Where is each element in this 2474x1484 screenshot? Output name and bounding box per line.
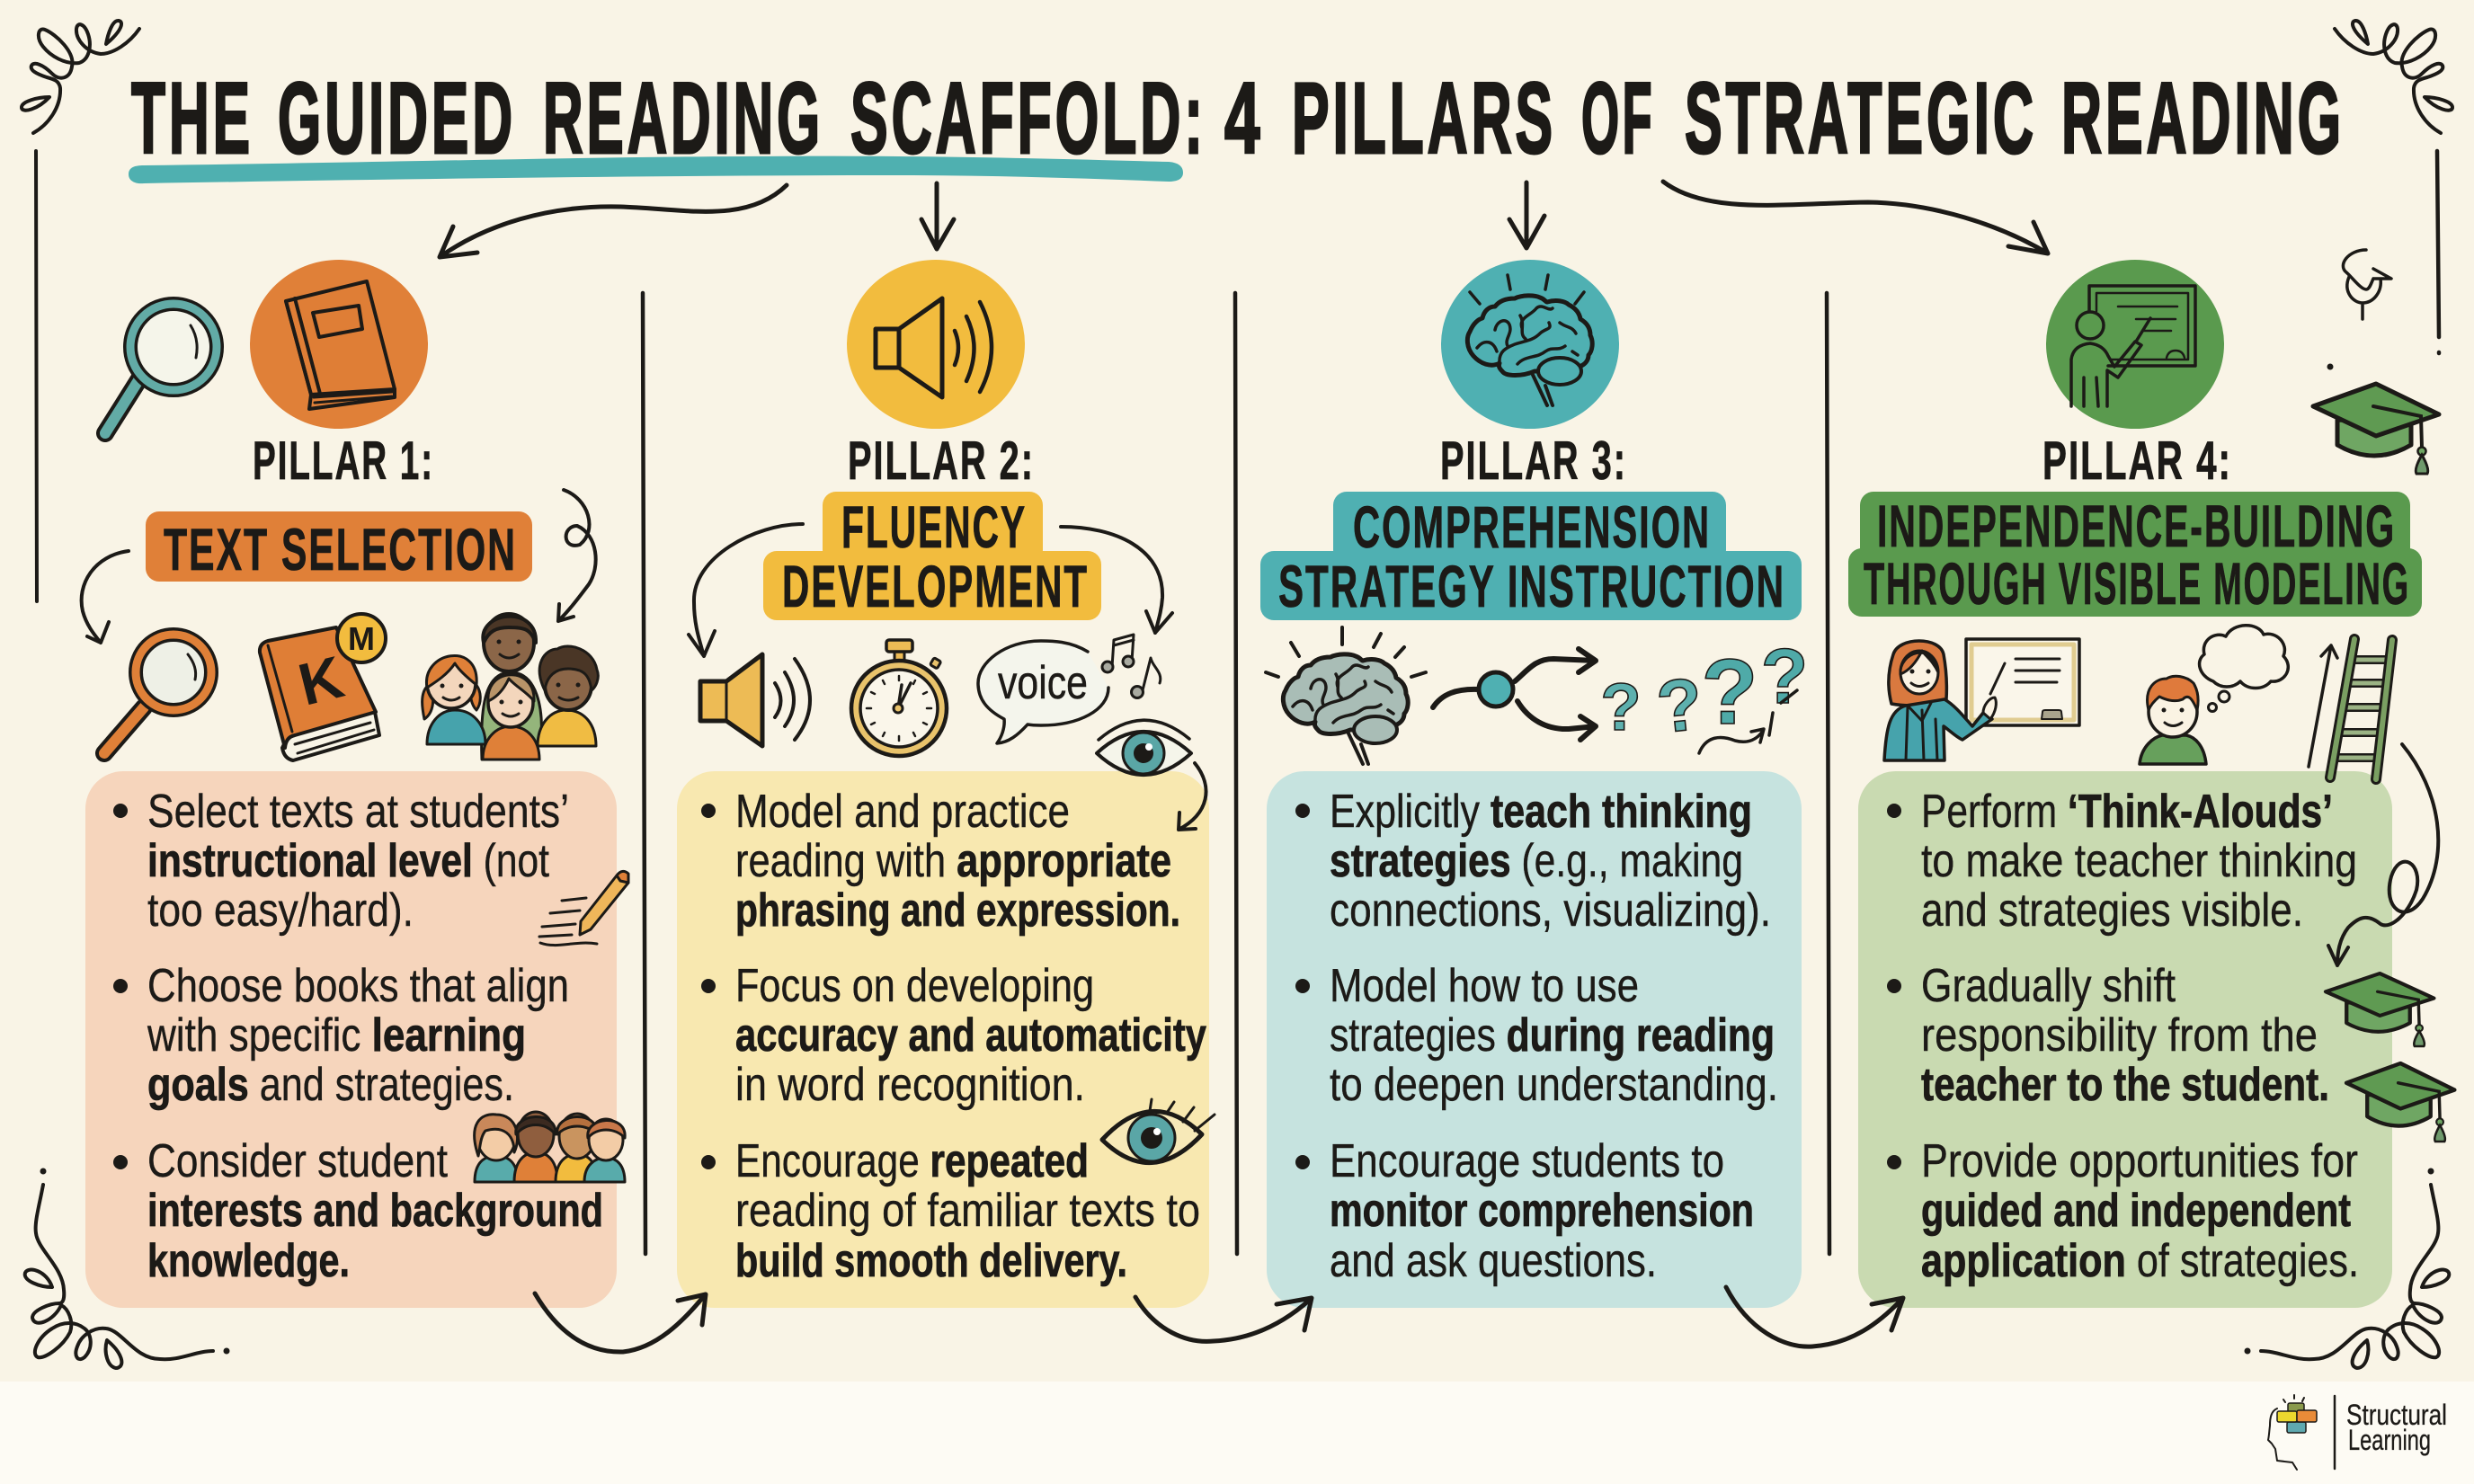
panel: text selection: knowledge. xyxy=(147,1235,350,1287)
label: pillar 1: PILLAR 1: xyxy=(253,431,434,491)
label: pillar 3: PILLAR 3: xyxy=(1440,431,1627,491)
tag: comprehension strategy instruction xyxy=(1260,492,1802,620)
flourish: top left xyxy=(22,21,139,133)
tag: comprehension strategy instruction: COMPREHENSION xyxy=(1353,493,1711,560)
panel: comprehension strategy instruction: connections, visualizing). xyxy=(1330,884,1771,937)
tag: fluency development xyxy=(763,492,1101,620)
arrow: title to pillar 1 xyxy=(440,185,787,257)
arrow: tag to voice xyxy=(1061,527,1172,633)
right margin line xyxy=(2437,151,2439,353)
panel: independence building: guided and independent xyxy=(1921,1185,2351,1237)
icon: eye xyxy=(1097,720,1191,775)
label: pillar 2: PILLAR 2: xyxy=(848,431,1035,491)
icon: question marks: ? xyxy=(1653,663,1706,749)
flourish: bottom left xyxy=(25,1169,230,1368)
panel: comprehension strategy instruction: strategies (e.g., making xyxy=(1330,835,1743,887)
footer band xyxy=(0,1382,2474,1484)
tag: text selection xyxy=(146,511,532,582)
arrow: panel 3 to panel 4 xyxy=(1726,1287,1903,1346)
panel: comprehension strategy instruction: to deepen understanding. xyxy=(1330,1059,1778,1111)
panel: independence building: Gradually shift xyxy=(1921,960,2176,1012)
panel: text selection: Consider student xyxy=(147,1135,448,1187)
panel: comprehension strategy instruction: and ask questions. xyxy=(1330,1235,1657,1287)
icon: boy xyxy=(2140,676,2206,764)
panel: text selection: too easy/hard). xyxy=(147,884,414,937)
panel: comprehension strategy instruction: Model how to use xyxy=(1330,960,1639,1012)
title: SCAFFOLD: xyxy=(850,62,1206,174)
arrow: title to pillar 3 xyxy=(1509,182,1544,248)
icon: levelled book K M: K xyxy=(292,643,350,718)
title xyxy=(131,62,2345,174)
icon: graduation cap top xyxy=(2313,384,2439,474)
icon: question marks: ? xyxy=(1761,634,1808,720)
icon: up arrow and ladder xyxy=(2309,639,2392,779)
panel: text selection: with specific learning xyxy=(147,1009,526,1062)
panel: independence building: application of strategies. xyxy=(1921,1235,2359,1287)
pillar 3 column xyxy=(1260,260,1808,1308)
panel: fluency development: reading of familiar texts to xyxy=(735,1185,1200,1237)
logo text: Structural xyxy=(2346,1399,2447,1431)
panel: fluency development: Encourage repeated xyxy=(735,1135,1089,1187)
icon: book in orange circle xyxy=(250,260,428,429)
icon: small students xyxy=(475,1112,625,1182)
icon: stopwatch xyxy=(851,640,947,756)
panel: text selection: Choose books that align xyxy=(147,960,569,1012)
icon: branching node xyxy=(1433,649,1596,740)
icon: graduation cap middle xyxy=(2326,973,2434,1046)
icon: voice speech bubble xyxy=(978,641,1108,743)
arrow: ladder curl to caps xyxy=(2328,744,2438,965)
icon: graduation cap lower xyxy=(2346,1063,2454,1142)
panel: text selection: goals and strategies. xyxy=(147,1059,514,1111)
arrow: panel 2 to panel 3 xyxy=(1135,1297,1312,1341)
tag: independence-building through visible modeling xyxy=(1848,492,2422,617)
icon: voice speech bubble: voice xyxy=(998,657,1088,709)
panel: text selection: interests and background xyxy=(147,1185,603,1237)
panel: independence building: Provide opportunities for xyxy=(1921,1135,2358,1187)
logo text: Learning xyxy=(2348,1424,2431,1456)
logo: Structural Learning xyxy=(2268,1395,2447,1470)
panel: comprehension strategy instruction: Encourage students to xyxy=(1330,1135,1724,1187)
panel: fluency development xyxy=(677,771,1209,1308)
icon: group of students xyxy=(423,614,598,760)
title: OF xyxy=(1581,62,1655,174)
panel: text selection: instructional level (not xyxy=(147,835,549,887)
panel: text selection: Select texts at students’ xyxy=(147,786,569,838)
flourish: bottom right xyxy=(2244,1169,2449,1368)
pillar 1 column xyxy=(82,260,628,1308)
panel: fluency development: in word recognition. xyxy=(735,1059,1085,1111)
icon: teal magnifier xyxy=(105,304,217,433)
icon: brain in teal circle xyxy=(1441,260,1619,429)
tag: comprehension strategy instruction: STRATEGY INSTRUCTION xyxy=(1278,553,1785,619)
icon: head with puzzle blocks xyxy=(2268,1395,2317,1470)
tag: fluency development: FLUENCY xyxy=(841,493,1027,560)
icon: orange magnifier xyxy=(104,635,211,753)
left margin line xyxy=(36,151,37,601)
title: STRATEGIC xyxy=(1685,62,2037,174)
logo divider xyxy=(2334,1396,2336,1469)
flourish: top right xyxy=(2335,21,2452,133)
title underline xyxy=(129,156,1183,183)
icon: pencil xyxy=(539,871,628,946)
arrow: tag to magnifier xyxy=(82,551,129,643)
icon: speaker in yellow circle xyxy=(847,260,1025,429)
icon: speaker xyxy=(700,654,810,746)
panel: fluency development: Focus on developing xyxy=(735,960,1094,1012)
icon: question marks: ? xyxy=(1600,670,1642,744)
title: THE xyxy=(131,62,254,174)
icon: small head doodle xyxy=(2343,250,2391,319)
icon: teacher figure xyxy=(1884,641,1996,760)
icon: question marks xyxy=(1600,634,1808,749)
panel: text selection xyxy=(85,771,617,1308)
pillar 2 column xyxy=(677,260,1215,1308)
panel: independence building: to make teacher thinking xyxy=(1921,835,2357,887)
arrow: title to pillar 2 xyxy=(921,183,954,249)
icon: whiteboard xyxy=(1966,639,2079,725)
panel: comprehension strategy instruction xyxy=(1267,771,1802,1308)
title: READING xyxy=(543,62,823,174)
tag: text selection: TEXT SELECTION xyxy=(164,516,517,582)
panel: comprehension strategy instruction: Explicitly teach thinking xyxy=(1330,786,1752,838)
icon: levelled book K M xyxy=(260,614,386,760)
arrow: tag to speaker xyxy=(689,524,803,656)
title: GUIDED xyxy=(278,62,516,174)
panel: fluency development: build smooth delivery. xyxy=(735,1235,1127,1287)
panel: fluency development: reading with appropriate xyxy=(735,835,1171,887)
arrow: curly tag to students xyxy=(558,490,596,621)
title: 4 xyxy=(1224,62,1264,174)
panel: fluency development: accuracy and automaticity xyxy=(735,1009,1206,1062)
column dividers xyxy=(643,293,1829,1254)
pillar 4 column xyxy=(1848,250,2454,1308)
title: PILLARS xyxy=(1292,62,1556,174)
icon: levelled book K M: M xyxy=(348,620,375,657)
panel: fluency development: phrasing and expression. xyxy=(735,884,1180,937)
panel: comprehension strategy instruction: monitor comprehension xyxy=(1330,1185,1754,1237)
icon: squiggle arrow xyxy=(1699,690,1797,753)
arrow: panel 1 to panel 2 xyxy=(535,1293,706,1352)
panel: comprehension strategy instruction: strategies during reading xyxy=(1330,1009,1775,1062)
icon: music notes xyxy=(1102,635,1161,698)
panel: independence building: teacher to the student. xyxy=(1921,1059,2329,1111)
logo text xyxy=(2346,1399,2447,1456)
arrow: title to pillar 4 xyxy=(1663,182,2048,253)
panel: fluency development: Model and practice xyxy=(735,786,1070,838)
tag: fluency development: DEVELOPMENT xyxy=(782,553,1089,619)
icon: grey brain with rays xyxy=(1266,627,1426,764)
icon: question marks: ? xyxy=(1702,640,1758,743)
panel: independence building: Perform ‘Think-Alouds’ xyxy=(1921,786,2333,838)
panel: independence building xyxy=(1858,771,2392,1308)
panel: independence building: and strategies visible. xyxy=(1921,884,2303,937)
icon: eye with lashes xyxy=(1102,1099,1215,1163)
arrow: eye to panel xyxy=(1179,763,1206,830)
icon: teacher at board in green circle xyxy=(2046,260,2224,429)
label: pillar 4: PILLAR 4: xyxy=(2042,431,2232,491)
panel: independence building: responsibility from the xyxy=(1921,1009,2318,1062)
icon: thought bubble xyxy=(2200,626,2288,712)
